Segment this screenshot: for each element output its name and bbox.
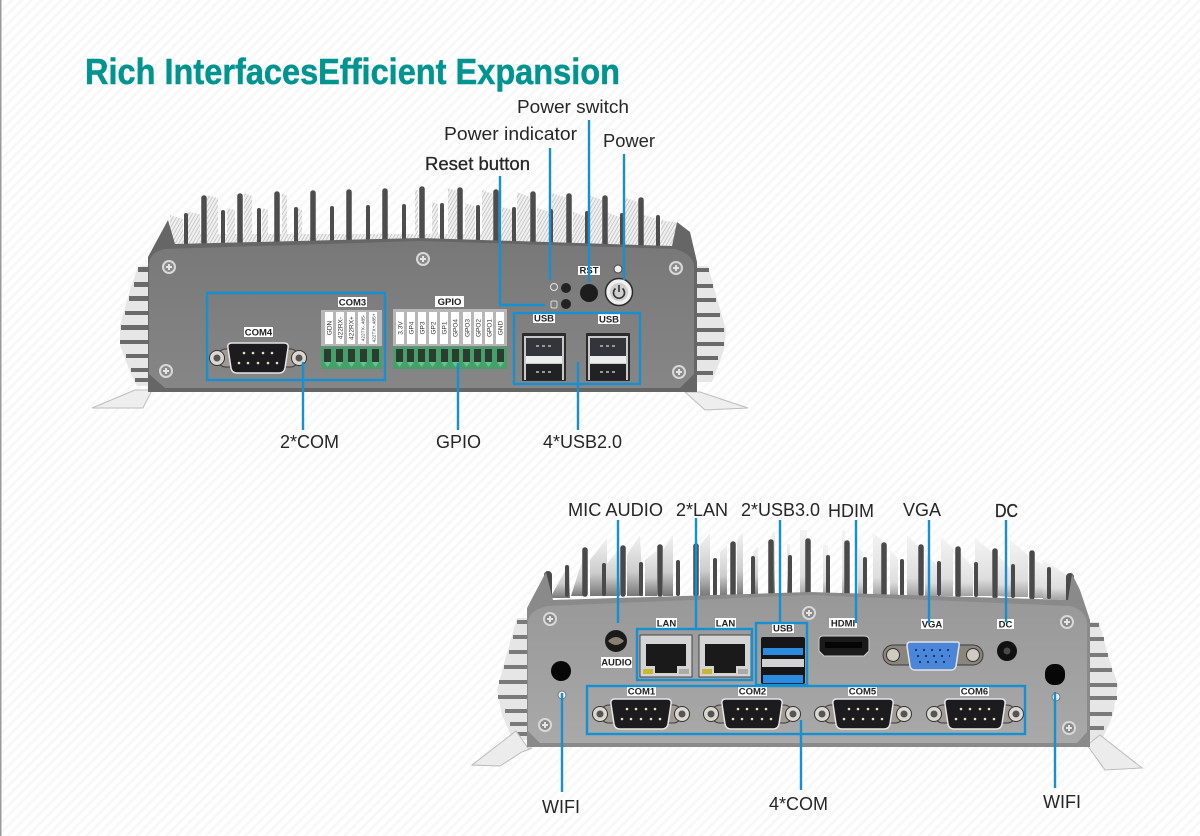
label: Power indicator: Power indicator <box>444 124 577 144</box>
leader: reset button <box>500 176 545 305</box>
ports: COM2: COM2 <box>739 686 766 698</box>
leader: WIFI left <box>561 693 563 792</box>
reset button <box>578 266 600 302</box>
terminal: GPIO: GPO4 <box>452 319 460 337</box>
ports: COM1: COM1 <box>628 686 656 698</box>
label: 4*USB2.0: 4*USB2.0 <box>543 432 622 452</box>
port: DC <box>997 619 1017 661</box>
leader: VGA <box>928 520 930 623</box>
device: front panel <box>472 530 1142 770</box>
leader: WIFI right <box>1054 692 1056 788</box>
ports: USB 2.0: USB <box>534 314 554 324</box>
front plate <box>149 241 694 388</box>
leader: 4*COM <box>800 720 802 790</box>
ports: LAN: LAN <box>657 618 676 630</box>
terminal: GPIO: GND <box>498 320 504 335</box>
ports: COM5 <box>814 686 912 729</box>
terminal: COM3: 422RX+ <box>348 316 356 340</box>
dark heat-sink fins <box>186 189 658 246</box>
ports: COM6 <box>926 686 1024 729</box>
wifi hole right <box>1045 664 1065 701</box>
terminal: COM3: COM3 <box>339 298 366 308</box>
label: 4*COM: 4*COM <box>769 794 828 814</box>
terminal: GPIO <box>393 296 507 369</box>
leader: power indicator <box>549 148 551 280</box>
leader: HDIM <box>855 520 857 623</box>
label: Power: Power <box>603 131 655 151</box>
highlight: USB 3.0 ports <box>756 623 807 685</box>
indicators <box>550 283 571 309</box>
label: WIFI left: WIFI <box>542 797 580 817</box>
terminal: GPIO: GPO2 <box>476 319 482 337</box>
terminal: GPIO: GP3 <box>420 321 426 335</box>
port: COM4: COM4 <box>245 328 273 338</box>
port: VGA: VGA <box>922 620 942 630</box>
leader: power <box>623 154 625 280</box>
mounting feet <box>92 390 748 410</box>
terminal: GPIO: GPO3 <box>464 319 472 337</box>
ports: COM6: COM6 <box>961 686 988 698</box>
terminal: COM3: 422TX-,485- <box>360 314 366 341</box>
ports: COM2 <box>704 686 800 729</box>
title: Rich InterfacesEfficient Expansion <box>85 51 620 92</box>
terminal: GPIO: GPIO <box>438 297 461 308</box>
dark heat-sink fins <box>548 541 1070 600</box>
ports: COM5: COM5 <box>849 686 877 698</box>
ports: USB 3.0: USB <box>773 624 793 634</box>
port: HDMI: HDMI <box>831 618 855 630</box>
white heat-sink fins <box>170 188 677 249</box>
highlight: LAN ports <box>637 629 752 680</box>
leader: DC <box>1005 520 1007 622</box>
highlight: COM ports <box>587 686 1025 734</box>
port: COM4 <box>210 327 306 373</box>
label: WIFI right: WIFI <box>1043 792 1081 812</box>
ports: USB 2.0: USB <box>599 314 619 326</box>
ports: LAN: LAN <box>716 618 735 630</box>
port: audio: AUDIO <box>601 658 632 668</box>
wifi hole left <box>551 661 571 699</box>
leader: MIC AUDIO <box>617 520 619 623</box>
highlight: USB ports <box>514 313 640 384</box>
leader: 2*USB3.0 <box>779 520 781 623</box>
label: 2*LAN: 2*LAN <box>676 500 728 520</box>
leader: 2*LAN <box>695 518 697 629</box>
terminal: GPIO: 3.3V <box>398 321 404 335</box>
terminal: COM3: GDN <box>326 320 334 335</box>
terminal: GPIO: GP1 <box>442 321 448 335</box>
terminal: COM3 <box>321 297 382 369</box>
side fins <box>497 618 1118 740</box>
panel screws <box>159 252 686 379</box>
port: DC: DC <box>999 620 1012 630</box>
label: DC: DC <box>995 501 1018 521</box>
terminal: GPIO: GPO1 <box>486 319 494 337</box>
label: GPIO: GPIO <box>436 432 481 452</box>
highlight: COM ports <box>207 293 385 380</box>
label: Power switch: Power switch <box>517 97 629 117</box>
label: 2*USB3.0: 2*USB3.0 <box>741 500 820 520</box>
terminal: GPIO: GP4 <box>408 321 416 335</box>
leader: GPIO <box>457 363 459 430</box>
label: Reset button: Reset button <box>425 154 530 174</box>
leader: 4*USB2.0 <box>577 362 579 430</box>
white heat-sink fins <box>550 530 1067 600</box>
ports: LAN <box>640 618 751 677</box>
label: 2*COM: 2*COM <box>280 432 339 452</box>
power button <box>606 265 632 306</box>
leader: 2*COM <box>302 362 304 430</box>
leader: power switch <box>588 120 590 282</box>
port: audio <box>601 630 632 668</box>
chassis <box>148 220 697 392</box>
terminal: COM3: 422TX+,485+ <box>372 313 378 343</box>
label: MIC AUDIO: MIC AUDIO <box>568 500 663 520</box>
label: HDIM: HDIM <box>828 501 874 521</box>
ports: COM1 <box>592 686 690 729</box>
panel screws <box>538 606 1076 735</box>
label: VGA: VGA <box>903 500 941 520</box>
reset button: RST <box>580 266 599 276</box>
front plate <box>528 595 1087 743</box>
mounting feet <box>472 731 1142 770</box>
terminal: COM3: 422RX- <box>338 317 344 339</box>
ports: USB 2.0 <box>522 313 630 381</box>
terminal: GPIO: GP2 <box>430 321 438 335</box>
device: rear panel <box>92 188 748 410</box>
port: VGA <box>883 619 983 670</box>
side fins <box>120 265 726 386</box>
ports: USB 3.0 <box>761 623 805 684</box>
chassis <box>527 572 1090 747</box>
port: HDMI <box>819 618 869 656</box>
